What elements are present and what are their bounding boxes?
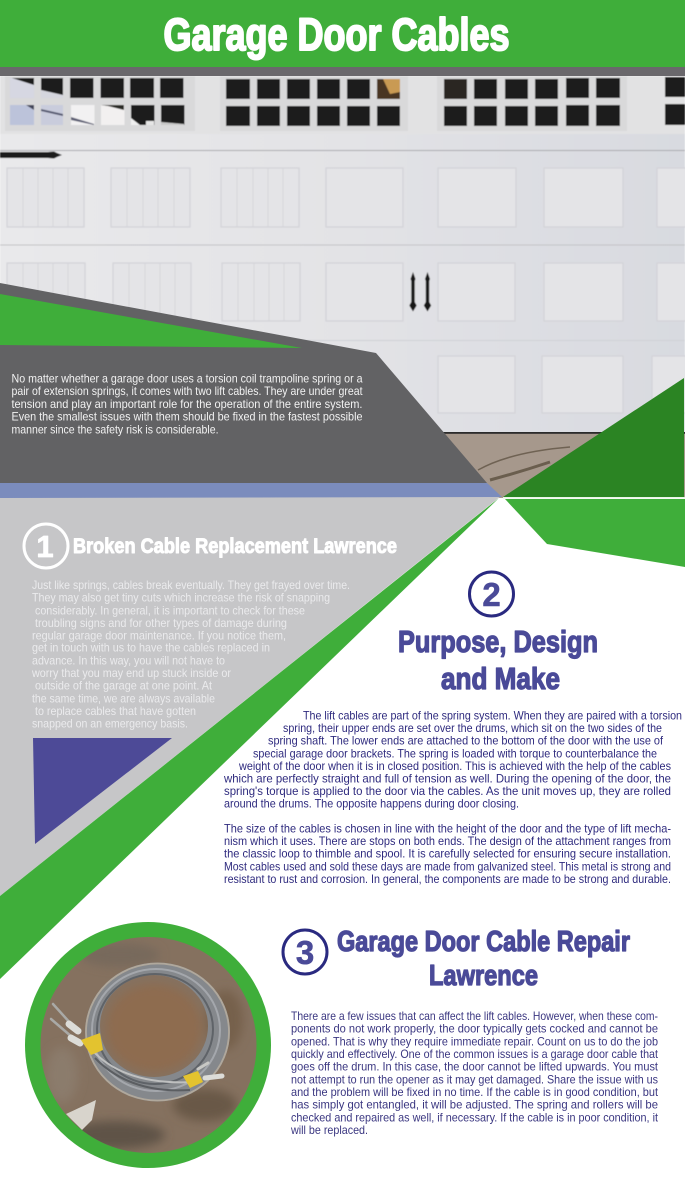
section 2 text: spring, their upper ends are set over the drums, which sit on the two sides of the	[283, 722, 662, 735]
green diagonal band	[0, 498, 499, 979]
section 1 text: They may also get tiny cuts which increase the risk of snapping	[32, 592, 330, 605]
blue strip	[0, 483, 502, 498]
heading: section 2	[398, 625, 598, 696]
heading: section 2: and Make	[441, 662, 560, 696]
number badge 3: 3	[296, 934, 314, 971]
icon: door hinge strap	[0, 152, 62, 158]
section 1 text: get in touch with us to have the cables replaced in	[32, 642, 270, 655]
heading: section 3	[337, 926, 630, 992]
white divider line	[503, 497, 685, 498]
green accent triangle	[0, 294, 302, 348]
section 2 text: special garage door brackets. The spring is loaded with torque to counterbalance the	[253, 747, 657, 760]
section 1 text: to replace cables that have gotten	[35, 705, 196, 718]
number badge 2: 2	[482, 576, 501, 613]
heading: section 1: Broken Cable Replacement Lawrence	[73, 534, 397, 558]
heading: section 3: Lawrence	[429, 960, 538, 992]
section 2 text: The size of the cables is chosen in line with the height of the door and the type of lift mecha-	[224, 823, 671, 836]
section 3 text: quickly and effectively. One of the common issues is a garage door cable that	[291, 1048, 659, 1061]
number badge 1	[24, 524, 68, 568]
section 1 text: the same time, we are always available	[32, 692, 215, 705]
section 1 text: advance. In this way, you will not have to	[32, 654, 225, 667]
intro text: tension and play an important role for the operation of the entire system.	[12, 398, 362, 411]
section 3 text: will be replaced.	[290, 1124, 368, 1137]
section 1 text: considerably. In general, it is important to check for these	[35, 604, 305, 617]
header underline	[0, 67, 685, 76]
section 3 text: goes off the drum. In this case, the door cannot be lifted upwards. You must	[291, 1061, 659, 1074]
number badge 2	[470, 572, 514, 616]
section 1 text: worry that you may end up stuck inside or	[31, 667, 231, 680]
intro text: No matter whether a garage door uses a torsion coil trampoline spring or a	[12, 373, 363, 386]
photo: coiled cables in green ring	[25, 922, 271, 1168]
section 3 text: checked and repaired as well, if necessary. If the cable is in poor condition, it	[291, 1111, 659, 1124]
section 3 text	[290, 1010, 659, 1137]
panel: section 1 gray background	[0, 496, 501, 896]
intro text: Even the smallest issues with them should be fixed in the fastest possible	[12, 411, 362, 424]
number badge 1: 1	[36, 529, 54, 564]
heading: section 2: Purpose, Design	[398, 625, 598, 659]
section 2 text: spring's torque is applied to the door via the cables. As the unit moves up, they are rolled	[224, 785, 671, 798]
intro text: pair of extension springs, it comes with two lift cables. They are under great	[12, 385, 363, 398]
door windows	[10, 77, 685, 126]
section 2 text: spring shaft. The lower ends are attached to the bottom of the door with the use of	[268, 735, 664, 748]
section 2 text: the classic loop to thimble and spool. It is carefully selected for ensuring secure installation.	[224, 848, 671, 861]
photo: white garage door	[0, 76, 685, 434]
intro text	[12, 373, 363, 436]
title: Garage Door Cables	[164, 9, 510, 60]
section 2 text: around the drums. The opposite happens during door closing.	[224, 798, 519, 811]
icon: door handles	[409, 272, 431, 312]
section 2 text: nism which it uses. There are stops on both ends. The design of the attachment ranges from	[224, 835, 671, 848]
section 1 text: troubling signs and for other types of damage during	[35, 617, 287, 630]
door panels	[7, 168, 685, 413]
section 1 text: snapped on an emergency basis.	[32, 718, 188, 731]
header band	[0, 0, 685, 67]
section 2 text	[223, 709, 682, 886]
section 3 text: opened. That is why they require immediate repair. Count on us to do the job	[291, 1035, 658, 1048]
section 1 text	[31, 579, 350, 731]
section 1 text: Just like springs, cables break eventually. They get frayed over time.	[32, 579, 350, 592]
section 3 text: has simply got entangled, it will be adjusted. The spring and rollers will be	[291, 1099, 658, 1112]
intro text: manner since the safety risk is considerable.	[12, 423, 218, 436]
number badge 3	[283, 930, 327, 974]
green top right shape	[505, 499, 685, 567]
dark green triangle	[503, 378, 684, 497]
section 1 text: regular garage door maintenance. If you notice them,	[32, 630, 286, 643]
section 2 text: which are perfectly straight and full of tension as well. During the opening of the door, the	[223, 772, 671, 785]
photo: concrete driveway	[440, 432, 685, 498]
section 3 text: not attempt to run the opener as it may get damaged. Share the issue with us	[291, 1073, 658, 1086]
door panel grooves	[23, 168, 284, 323]
purple triangle	[33, 738, 172, 844]
section 3 text: and the problem will be fixed in no time. If the cable is in good condition, but	[291, 1086, 659, 1099]
panel: intro dark shape	[0, 283, 487, 483]
section 3 text: ponents do not work properly, the door typically gets cocked and cannot be	[291, 1023, 658, 1036]
section 1 text: outside of the garage at one point. At	[35, 680, 213, 693]
